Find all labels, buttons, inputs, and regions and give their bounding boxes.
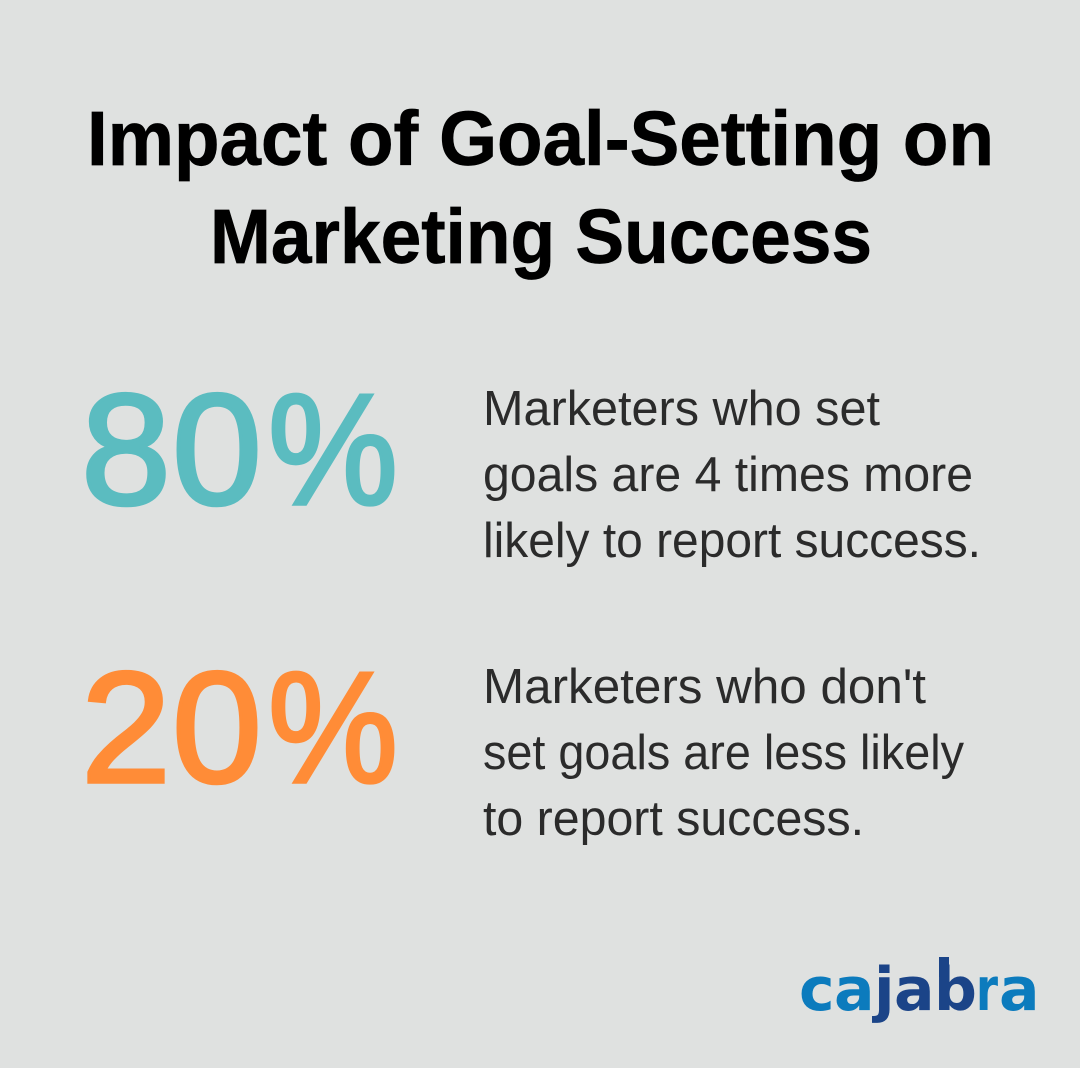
title: Impact of Goal-Setting on xyxy=(87,96,994,182)
logo: cajabra: a xyxy=(894,955,934,1025)
title: Marketing Success xyxy=(210,194,872,280)
stat description: marketers who don't set goals: Marketers who don't xyxy=(483,660,926,714)
stat description: marketers who set goals: goals are 4 times more xyxy=(483,448,973,502)
stat description: marketers who don't set goals: set goals are less likely xyxy=(483,726,964,780)
stat description: marketers who set goals: Marketers who set xyxy=(483,382,880,436)
stat description: marketers who set goals: likely to report success. xyxy=(483,514,981,568)
stat value: 20%: 0 xyxy=(172,640,262,816)
logo: cajabra: b xyxy=(934,955,977,1025)
stat: 20 percent xyxy=(81,640,964,846)
stat value: 80%: % xyxy=(268,362,398,538)
stat: 80 percent xyxy=(81,362,981,568)
logo: cajabra: a xyxy=(834,955,874,1025)
logo: cajabra: j xyxy=(872,955,895,1025)
logo: cajabra: c xyxy=(799,955,835,1025)
stat description: marketers who set goals xyxy=(483,382,981,568)
stat value: 80% xyxy=(81,362,398,538)
stat value: 20%: % xyxy=(268,640,398,816)
stat description: marketers who don't set goals: to report success. xyxy=(483,792,864,846)
stat value: 80%: 0 xyxy=(172,362,262,538)
stat description: marketers who don't set goals xyxy=(483,660,964,846)
logo: cajabra: r xyxy=(976,955,998,1025)
logo: cajabra: a xyxy=(999,955,1040,1025)
stat value: 80%: 8 xyxy=(81,362,171,538)
title xyxy=(87,96,994,280)
stat value: 20% xyxy=(81,640,398,816)
stat value: 20%: 2 xyxy=(81,640,171,816)
logo: cajabra xyxy=(799,955,1040,1025)
